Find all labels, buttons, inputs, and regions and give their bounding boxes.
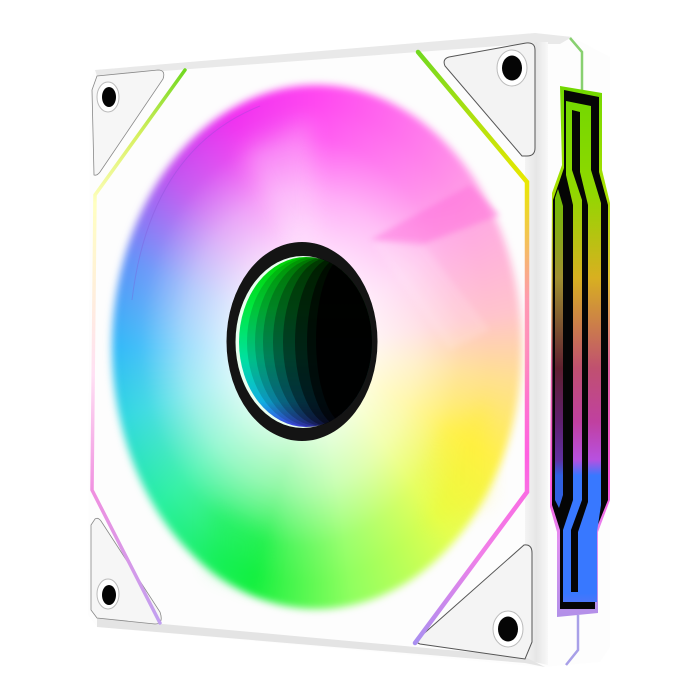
fan blades RGB disc <box>112 85 522 609</box>
fan details and hub <box>132 106 500 592</box>
LED strip: front right edge <box>415 52 527 643</box>
corner pad: bottom left <box>91 518 161 624</box>
side RGB light panel <box>550 86 610 617</box>
case body <box>88 33 610 667</box>
corner pad: top left <box>92 70 164 175</box>
white centre glow <box>112 85 522 609</box>
hub infinity mirror <box>226 242 378 441</box>
LED thin line: side bottom <box>566 615 578 665</box>
corner pad: top right <box>444 43 535 156</box>
corner pad: bottom right <box>417 545 532 659</box>
blade highlights <box>132 106 500 590</box>
LED thin line: side top <box>570 38 582 90</box>
LED strip: front left edge <box>92 70 185 623</box>
fan product image <box>90 33 610 667</box>
